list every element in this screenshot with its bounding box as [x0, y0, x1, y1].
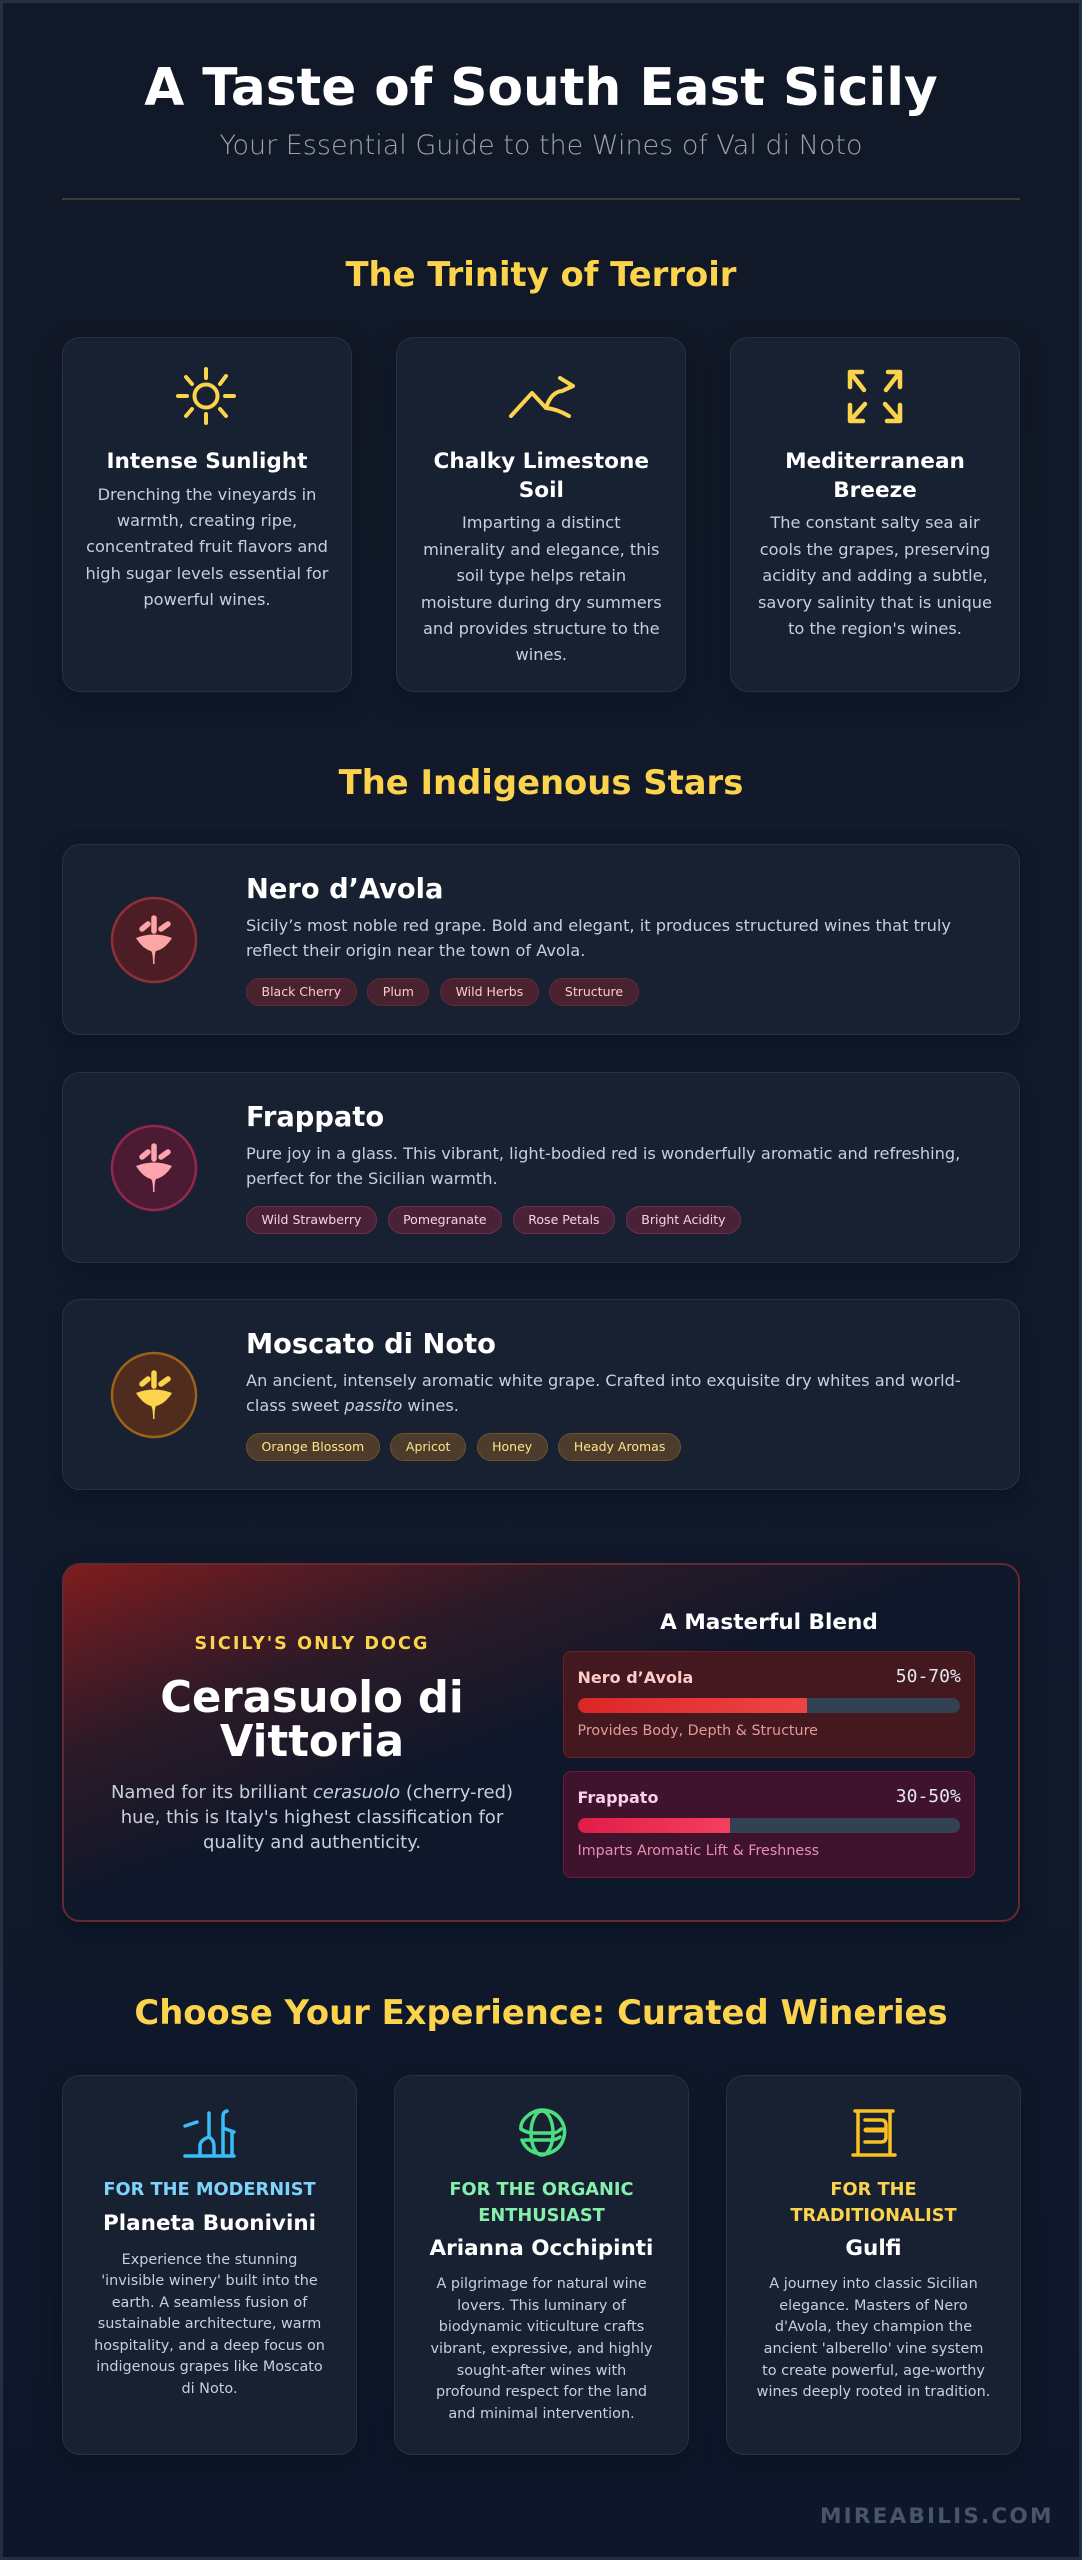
DOCG name: Cerasuolo di [160, 1673, 464, 1723]
DOCG name [160, 1673, 464, 1767]
icon: modern winery [183, 2109, 236, 2158]
card text: moisture during dry summers [421, 593, 662, 612]
winery description: A pilgrimage for natural wine [436, 2276, 647, 2292]
card title [434, 449, 649, 503]
panel: Mediterranean Breeze [730, 337, 1020, 692]
icon: classical column [851, 2109, 897, 2157]
proportion bar [578, 1698, 960, 1712]
DOCG name: Vittoria [220, 1717, 404, 1767]
icon: globe [519, 2108, 566, 2157]
winery description: vibrant, expressive, and highly [430, 2341, 653, 2357]
panel: Frappato [62, 1072, 1020, 1263]
grape description: Pure joy in a glass. This vibrant, light-bodied red is wonderfully aromatic and refreshing, [246, 1144, 960, 1162]
grape description [246, 1144, 960, 1188]
winery description: and minimal intervention. [448, 2406, 635, 2422]
icon: four arrows [848, 370, 902, 424]
heading: Curated Wineries: Choose Your Experience: Curated Wineries [134, 1992, 948, 2032]
flavor tags [246, 1206, 741, 1234]
proportion bar [578, 1818, 960, 1832]
blend row: Frappato [563, 1771, 975, 1878]
heading: The Indigenous Stars: The Indigenous Stars [339, 762, 743, 802]
winery description: hospitality, and a deep focus on [94, 2338, 325, 2354]
winery description: sought-after wines with [457, 2363, 626, 2379]
winery description: biodynamic viticulture crafts [439, 2319, 644, 2335]
panel: Cerasuolo di Vittoria [62, 1563, 1020, 1922]
winery description: d'Avola, they champion the [775, 2319, 972, 2335]
grape name: Moscato di Noto [246, 1329, 496, 1360]
percentage: 50-70% [896, 1666, 961, 1686]
winery description: profound respect for the land [436, 2384, 647, 2400]
grape description: reflect their origin near the town of Avola. [246, 940, 585, 960]
card text: and provides structure to the [423, 619, 660, 638]
winery name: Arianna Occhipinti [430, 2236, 653, 2260]
card title: Intense Sunlight [106, 449, 308, 474]
role: Imparts Aromatic Lift & Freshness [578, 1842, 819, 1858]
audience label: TRADITIONALIST [790, 2204, 957, 2226]
winery name: Planeta Buonivini [103, 2210, 316, 2236]
card text: cools the grapes, preserving [760, 540, 990, 559]
DOCG description: Named for its brilliant cerasuolo (cherry-red) [111, 1782, 513, 1802]
card text: soil type helps retain [456, 566, 626, 585]
grape description [246, 916, 951, 960]
flavor tags: Plum [383, 984, 414, 998]
audience label: FOR THE ORGANIC [449, 2179, 634, 2200]
winery name: Gulfi [845, 2236, 902, 2260]
winery description: 'invisible winery' built into the [101, 2273, 318, 2289]
panel: Nero d'Avola [62, 844, 1020, 1035]
icon: pink grape badge [110, 1124, 198, 1212]
card text [86, 484, 328, 609]
panel: Planeta Buonivini [62, 2075, 357, 2455]
icon: sun [176, 367, 236, 425]
flavor tags [246, 1433, 681, 1461]
grape description [246, 1370, 961, 1414]
grape name: Frappato [246, 1102, 384, 1133]
card title: Chalky Limestone [434, 449, 649, 474]
audience label [449, 2179, 634, 2226]
flavor tags: Bright Acidity [641, 1212, 726, 1226]
winery description: indigenous grapes like Moscato [96, 2359, 323, 2375]
winery description: ancient 'alberello' vine system [764, 2341, 983, 2357]
card text: Drenching the vineyards in [98, 484, 316, 504]
flavor tags: Apricot [406, 1438, 450, 1454]
winery description: elegance. Masters of Nero [779, 2298, 968, 2314]
grape description: Sicily’s most noble red grape. Bold and elegant, it produces structured wines that truly [246, 916, 951, 934]
card text: warmth, creating ripe, [117, 511, 297, 530]
winery description: A journey into classic Sicilian [769, 2276, 978, 2292]
grape description: An ancient, intensely aromatic white grape. Crafted into exquisite dry whites and world- [246, 1370, 961, 1390]
blend row: Nero d'Avola [563, 1651, 975, 1758]
flavor tags: Heady Aromas [574, 1438, 665, 1454]
card title: Mediterranean [785, 449, 965, 474]
panel: Chalky Limestone Soil [396, 337, 686, 692]
flavor tags: Wild Herbs [456, 984, 523, 998]
winery description [430, 2276, 653, 2422]
card text: powerful wines. [143, 590, 271, 609]
grape description: perfect for the Sicilian warmth. [246, 1168, 498, 1188]
winery description: Experience the stunning [122, 2252, 297, 2268]
card text: to the region's wines. [788, 619, 962, 638]
card text: minerality and elegance, this [423, 540, 659, 559]
flavor tags: Pomegranate [403, 1212, 487, 1226]
eyebrow label: SICILY'S ONLY DOCG [195, 1634, 429, 1654]
panel: Moscato di Noto [62, 1299, 1020, 1490]
winery description: di Noto. [181, 2381, 238, 2397]
flavor tags: Structure [565, 984, 623, 998]
icon: red grape badge [110, 896, 198, 984]
divider [62, 198, 1020, 200]
flavor tags: Wild Strawberry [262, 1212, 361, 1226]
winery description: earth. A seamless fusion of [112, 2295, 307, 2311]
winery description: sustainable architecture, warm [98, 2316, 321, 2332]
flavor tags: Honey [492, 1438, 532, 1454]
card text: concentrated fruit flavors and [86, 537, 328, 556]
heading: A Masterful Blend: A Masterful Blend [660, 1610, 878, 1635]
card title [785, 449, 965, 503]
audience label: ENTHUSIAST [478, 2204, 605, 2226]
card title: Breeze [833, 478, 917, 503]
card title: Soil [519, 478, 564, 503]
role: Provides Body, Depth & Structure [578, 1722, 818, 1738]
heading: The Trinity of Terroir: The Trinity of Terroir [346, 254, 736, 294]
winery description: to create powerful, age-worthy [762, 2363, 985, 2379]
winery description: wines deeply rooted in tradition. [757, 2384, 990, 2400]
icon: mountain with arrow [508, 376, 576, 418]
winery description: lovers. This luminary of [457, 2298, 626, 2314]
card text: The constant salty sea air [770, 513, 980, 532]
grape label: Nero d’Avola [578, 1668, 693, 1686]
title: A Taste of South East Sicily [144, 58, 938, 118]
card text: wines. [516, 645, 567, 664]
panel: Arianna Occhipinti [394, 2075, 689, 2455]
audience label: FOR THE [830, 2179, 917, 2200]
grape description: class sweet passito wines. [246, 1396, 459, 1414]
grape label: Frappato [578, 1788, 658, 1806]
winery description [757, 2276, 990, 2400]
card text [421, 513, 662, 664]
flavor tags: Rose Petals [528, 1212, 600, 1226]
audience label: FOR THE MODERNIST [103, 2179, 316, 2200]
card text: savory salinity that is unique [758, 593, 992, 612]
flavor tags: Orange Blossom [262, 1438, 364, 1454]
percentage: 30-50% [896, 1786, 961, 1806]
panel: Gulfi [726, 2075, 1021, 2455]
panel: Intense Sunlight [62, 337, 352, 692]
audience label [790, 2179, 957, 2226]
card text: acidity and adding a subtle, [762, 566, 988, 585]
grape name: Nero d’Avola [246, 874, 443, 905]
footer brand: MIREABILIS.COM [820, 2504, 1054, 2528]
DOCG description: quality and authenticity. [203, 1832, 421, 1852]
card text: high sugar levels essential for [86, 564, 328, 583]
winery description [94, 2252, 325, 2397]
flavor tags [246, 978, 639, 1006]
subtitle: Your Essential Guide to the Wines of Val di Noto [220, 130, 862, 160]
DOCG description [111, 1782, 513, 1852]
flavor tags: Black Cherry [262, 984, 341, 998]
card text [758, 513, 992, 638]
DOCG description: hue, this is Italy's highest classification for [121, 1806, 503, 1828]
icon: gold grape badge [110, 1352, 198, 1438]
card text: Imparting a distinct [462, 513, 621, 532]
